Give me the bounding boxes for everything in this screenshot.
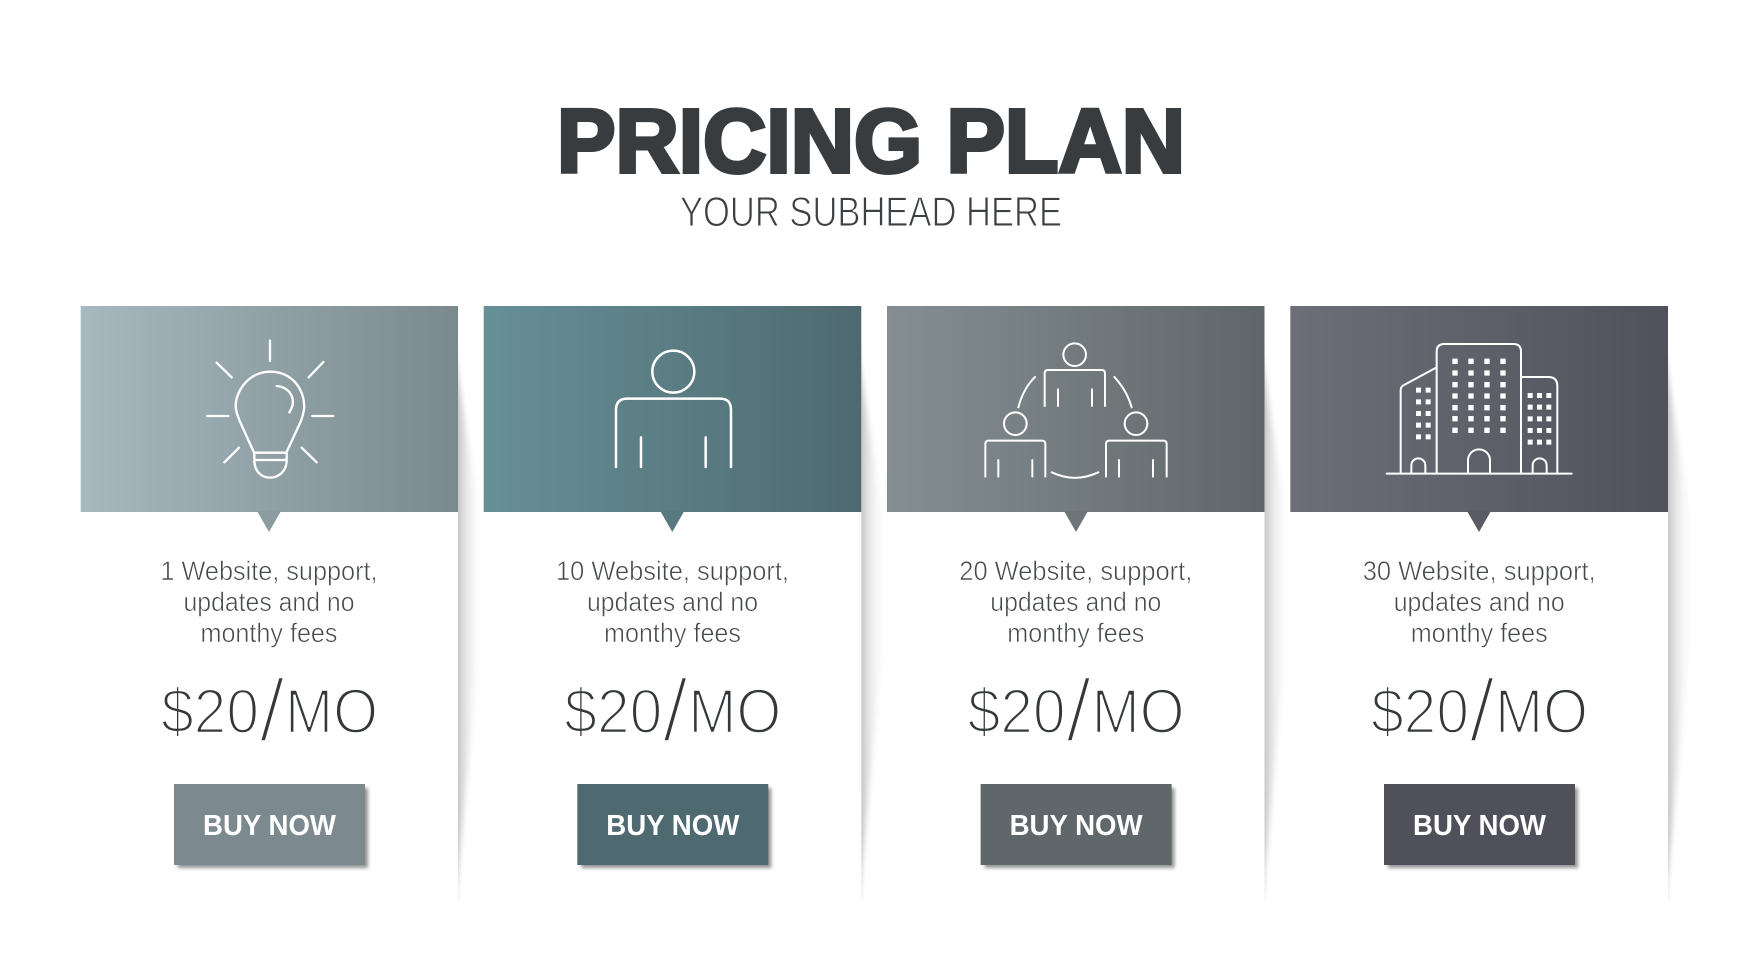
icon: office buildings [1387, 344, 1572, 474]
plan description: 20 Website, support, [959, 556, 1192, 586]
price: $20 [161, 677, 259, 747]
price: MO [688, 677, 781, 747]
price: / [662, 660, 689, 760]
plan description: 30 Website, support, [1363, 556, 1596, 586]
price [1371, 660, 1588, 760]
button: buy now [174, 784, 368, 868]
panel: plan 4 [1290, 306, 1684, 900]
price: MO [1092, 677, 1185, 747]
panel: plan 2 [484, 306, 883, 975]
icon: light bulb [207, 341, 333, 478]
header band [484, 306, 861, 512]
header band [887, 306, 1264, 512]
price [161, 660, 378, 760]
pointer [1467, 511, 1491, 532]
header band [1290, 306, 1668, 512]
button: buy now: BUY NOW [606, 810, 740, 842]
plan description [160, 556, 378, 648]
plan description [556, 556, 789, 648]
button: buy now: BUY NOW [1413, 810, 1547, 842]
icon: team of three [985, 343, 1167, 478]
plan description [1363, 556, 1596, 648]
subhead: YOUR SUBHEAD HERE [680, 188, 1062, 235]
plan description: updates and no [587, 587, 758, 617]
icon: person [616, 351, 731, 467]
plan description: 1 Website, support, [160, 556, 378, 586]
plan description [959, 556, 1192, 648]
price: / [1066, 660, 1092, 760]
price [968, 660, 1185, 760]
header band [81, 306, 458, 512]
price: $20 [1371, 677, 1469, 747]
plan description: monthy fees [1007, 618, 1144, 648]
button: buy now: BUY NOW [203, 810, 337, 842]
plan description: updates and no [990, 587, 1161, 617]
panel: plan 1 [81, 306, 480, 975]
price: / [1469, 660, 1495, 760]
plan description: updates and no [1394, 587, 1565, 617]
button: buy now [1384, 784, 1578, 868]
price [564, 660, 781, 760]
plan description: 10 Website, support, [556, 556, 789, 586]
plan description: monthy fees [604, 618, 741, 648]
price: $20 [564, 677, 662, 747]
price: MO [285, 677, 378, 747]
pointer [1064, 511, 1088, 532]
card shadow [458, 356, 474, 900]
plan description: monthy fees [1411, 618, 1548, 648]
pointer [660, 511, 684, 532]
card shadow [1668, 356, 1684, 900]
price: $20 [968, 677, 1066, 747]
pointer [257, 511, 281, 532]
price: / [259, 660, 285, 760]
card shadow [1264, 356, 1280, 900]
price: MO [1495, 677, 1588, 747]
button: buy now: BUY NOW [1010, 810, 1143, 842]
plan description: updates and no [184, 587, 354, 617]
panel: plan 3 [887, 306, 1286, 975]
title: PRICING PLAN [557, 92, 1185, 192]
plan description: monthy fees [200, 618, 338, 648]
card shadow [861, 358, 877, 899]
button: buy now [981, 784, 1175, 868]
button: buy now [577, 784, 771, 868]
